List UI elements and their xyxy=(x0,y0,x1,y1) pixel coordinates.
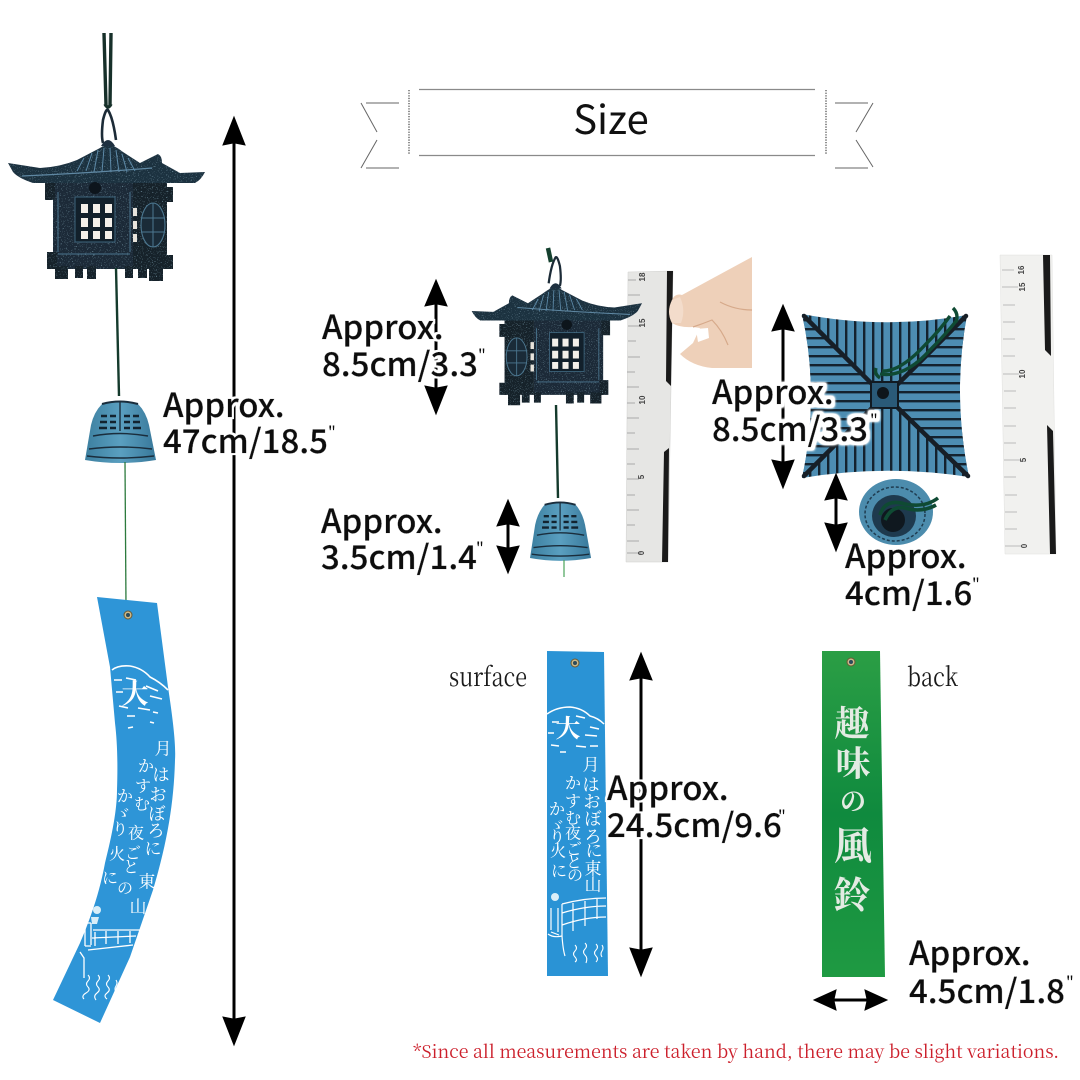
icon: curved blue paper strip: 大 xyxy=(122,672,148,712)
panel: strip surface xyxy=(547,651,608,976)
panel: strip back: の xyxy=(840,782,866,818)
icon: top view of roof xyxy=(802,308,969,478)
panel: strip back: 風 xyxy=(834,816,872,870)
icon: curved blue paper strip: かすむ夜ごとの xyxy=(117,754,154,898)
icon: cord xyxy=(548,248,551,262)
panel: strip surface: 月はおぼろに東山 xyxy=(582,750,602,896)
arrow: bell height xyxy=(497,500,519,573)
icon: curved blue paper strip: 月はおぼろに東山 xyxy=(130,734,172,918)
icon: curved blue paper strip xyxy=(53,597,175,1023)
label: total length xyxy=(163,379,336,463)
icon: ruler xyxy=(1000,255,1056,554)
title ribbon: Size xyxy=(361,88,873,168)
icon: ruler: 5 xyxy=(1019,457,1028,462)
label: bell height: 3.5cm/1.4 xyxy=(321,531,477,579)
label: bell height: " xyxy=(476,537,484,558)
label: roof width: 8.5cm/3.3 xyxy=(712,403,868,451)
label: bell height: Approx. xyxy=(321,495,443,543)
icon: ruler: 0 xyxy=(1020,543,1029,548)
arrow: strip length xyxy=(630,653,652,976)
icon: clapper string xyxy=(556,405,558,498)
label: roof width xyxy=(712,366,878,451)
label: strip width: " xyxy=(1066,971,1074,992)
label: bell diameter: " xyxy=(972,573,980,594)
caption: back: back xyxy=(907,657,958,694)
arrow: bell diameter xyxy=(825,474,847,551)
label: strip length: " xyxy=(778,805,786,826)
icon: ruler: 15 xyxy=(1018,282,1027,291)
label: lantern height: " xyxy=(478,344,486,365)
label: strip width: 4.5cm/1.8 xyxy=(909,965,1065,1013)
icon: ruler with hand: 15 xyxy=(638,318,647,327)
icon: ruler with hand: 18 xyxy=(638,272,647,281)
icon: ruler: 10 xyxy=(1018,369,1027,378)
label: total length: " xyxy=(328,421,336,442)
label: strip length: Approx. xyxy=(607,762,729,810)
label: strip width xyxy=(909,927,1074,1013)
icon: green wire xyxy=(563,560,565,577)
icon: hanging cord xyxy=(104,33,111,107)
panel: strip back xyxy=(822,651,885,977)
icon: curved blue paper strip: かゞり火に xyxy=(102,784,133,888)
panel: strip back: 味 xyxy=(835,737,871,787)
label: lantern height xyxy=(322,301,486,386)
panel: lantern and bell against ruler xyxy=(472,248,752,577)
label: strip length xyxy=(607,762,786,847)
icon: cast iron lantern xyxy=(8,110,205,281)
label: bell diameter: 4cm/1.6 xyxy=(845,567,972,615)
icon: bell from above xyxy=(859,479,938,545)
icon: bell xyxy=(85,401,156,463)
panel: strip surface: かすむ夜ごとの xyxy=(565,770,583,886)
caption: surface: surface xyxy=(449,657,527,694)
label: roof width: " xyxy=(870,409,878,430)
label: lantern height: 8.5cm/3.3 xyxy=(322,338,478,386)
label: total length: 47cm/18.5 xyxy=(163,415,328,463)
panel: strip back: 趣 xyxy=(834,697,870,747)
icon: ruler with hand xyxy=(626,257,752,562)
arrow: total length xyxy=(223,117,245,1045)
icon: clapper string xyxy=(116,268,119,396)
icon: ruler with hand: 10 xyxy=(638,395,647,404)
panel: strip surface: かゞり火に xyxy=(549,796,567,882)
panel: strip surface: 大 xyxy=(555,709,581,745)
arrow: roof width xyxy=(772,305,794,488)
label: roof width: Approx. xyxy=(712,366,834,414)
title ribbon: Size: Size xyxy=(573,88,649,146)
icon: lantern front xyxy=(472,257,642,405)
icon: thin green string xyxy=(125,462,126,606)
icon: bell xyxy=(530,502,591,561)
panel: strip back: 鈴 xyxy=(834,865,870,919)
label: strip length: 24.5cm/9.6 xyxy=(607,799,782,847)
label: bell diameter xyxy=(845,530,980,615)
icon: ruler with hand: 5 xyxy=(637,474,646,479)
label: strip width: Approx. xyxy=(909,927,1031,975)
icon: ruler with hand: 0 xyxy=(637,550,646,555)
footnote: *Since all measurements are taken by hand, there may be slight variations. xyxy=(413,1038,1059,1064)
icon: ruler: 16 xyxy=(1017,265,1026,274)
label: bell height xyxy=(321,495,484,579)
label: lantern height: Approx. xyxy=(322,301,444,349)
arrow: lantern height xyxy=(425,280,447,414)
panel: top view of lantern and bell with ruler xyxy=(802,255,1056,554)
panel: full wind chime with total length xyxy=(8,33,205,1023)
label: bell diameter: Approx. xyxy=(845,530,967,578)
arrow: strip width xyxy=(814,990,887,1010)
label: total length: Approx. xyxy=(163,379,285,427)
